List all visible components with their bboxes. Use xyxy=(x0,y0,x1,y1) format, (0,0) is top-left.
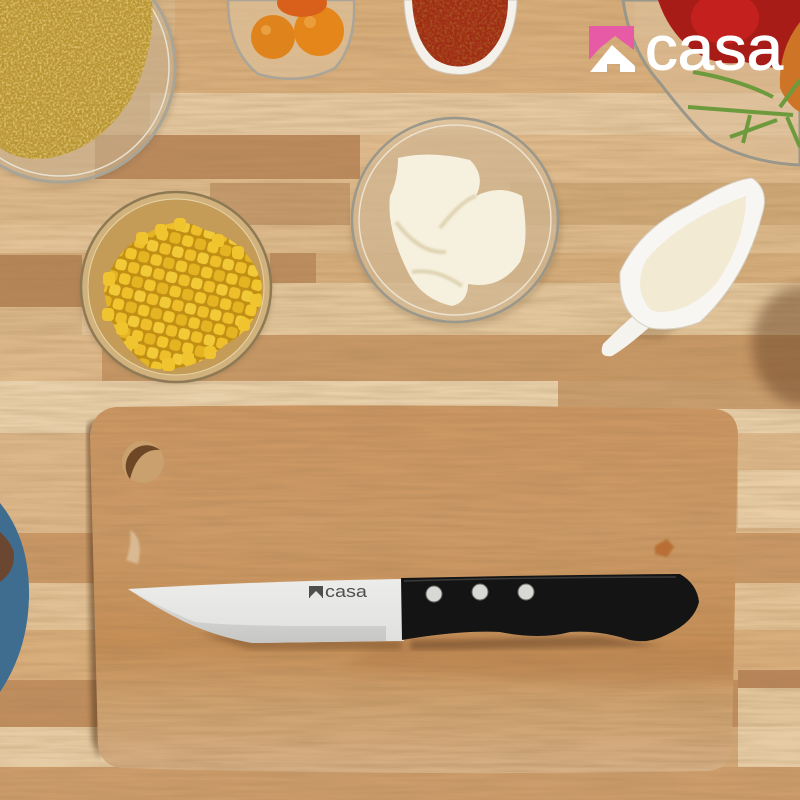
bowl: bulgur xyxy=(0,0,178,186)
casa logo xyxy=(589,14,784,84)
blue plate at left edge xyxy=(0,503,29,692)
logo icon: pink roof and white house xyxy=(589,26,635,72)
board hanging hole xyxy=(122,441,164,483)
bowl: kumquats xyxy=(228,0,354,79)
bowl: corn xyxy=(80,192,272,384)
gravy boat with cream xyxy=(602,178,764,356)
cutting board xyxy=(87,405,738,773)
bowl: tomatoes and herbs xyxy=(623,0,800,165)
handle rivets xyxy=(426,584,534,602)
knife handle xyxy=(401,574,699,641)
logo wordmark: casa xyxy=(645,14,784,84)
knife xyxy=(128,574,699,650)
bowl: paprika xyxy=(404,0,517,75)
knife blade brand mark xyxy=(309,582,368,601)
knife blade xyxy=(128,579,404,643)
knife blade brand mark: casa xyxy=(325,582,368,601)
bowl: cream cheese xyxy=(350,118,562,328)
